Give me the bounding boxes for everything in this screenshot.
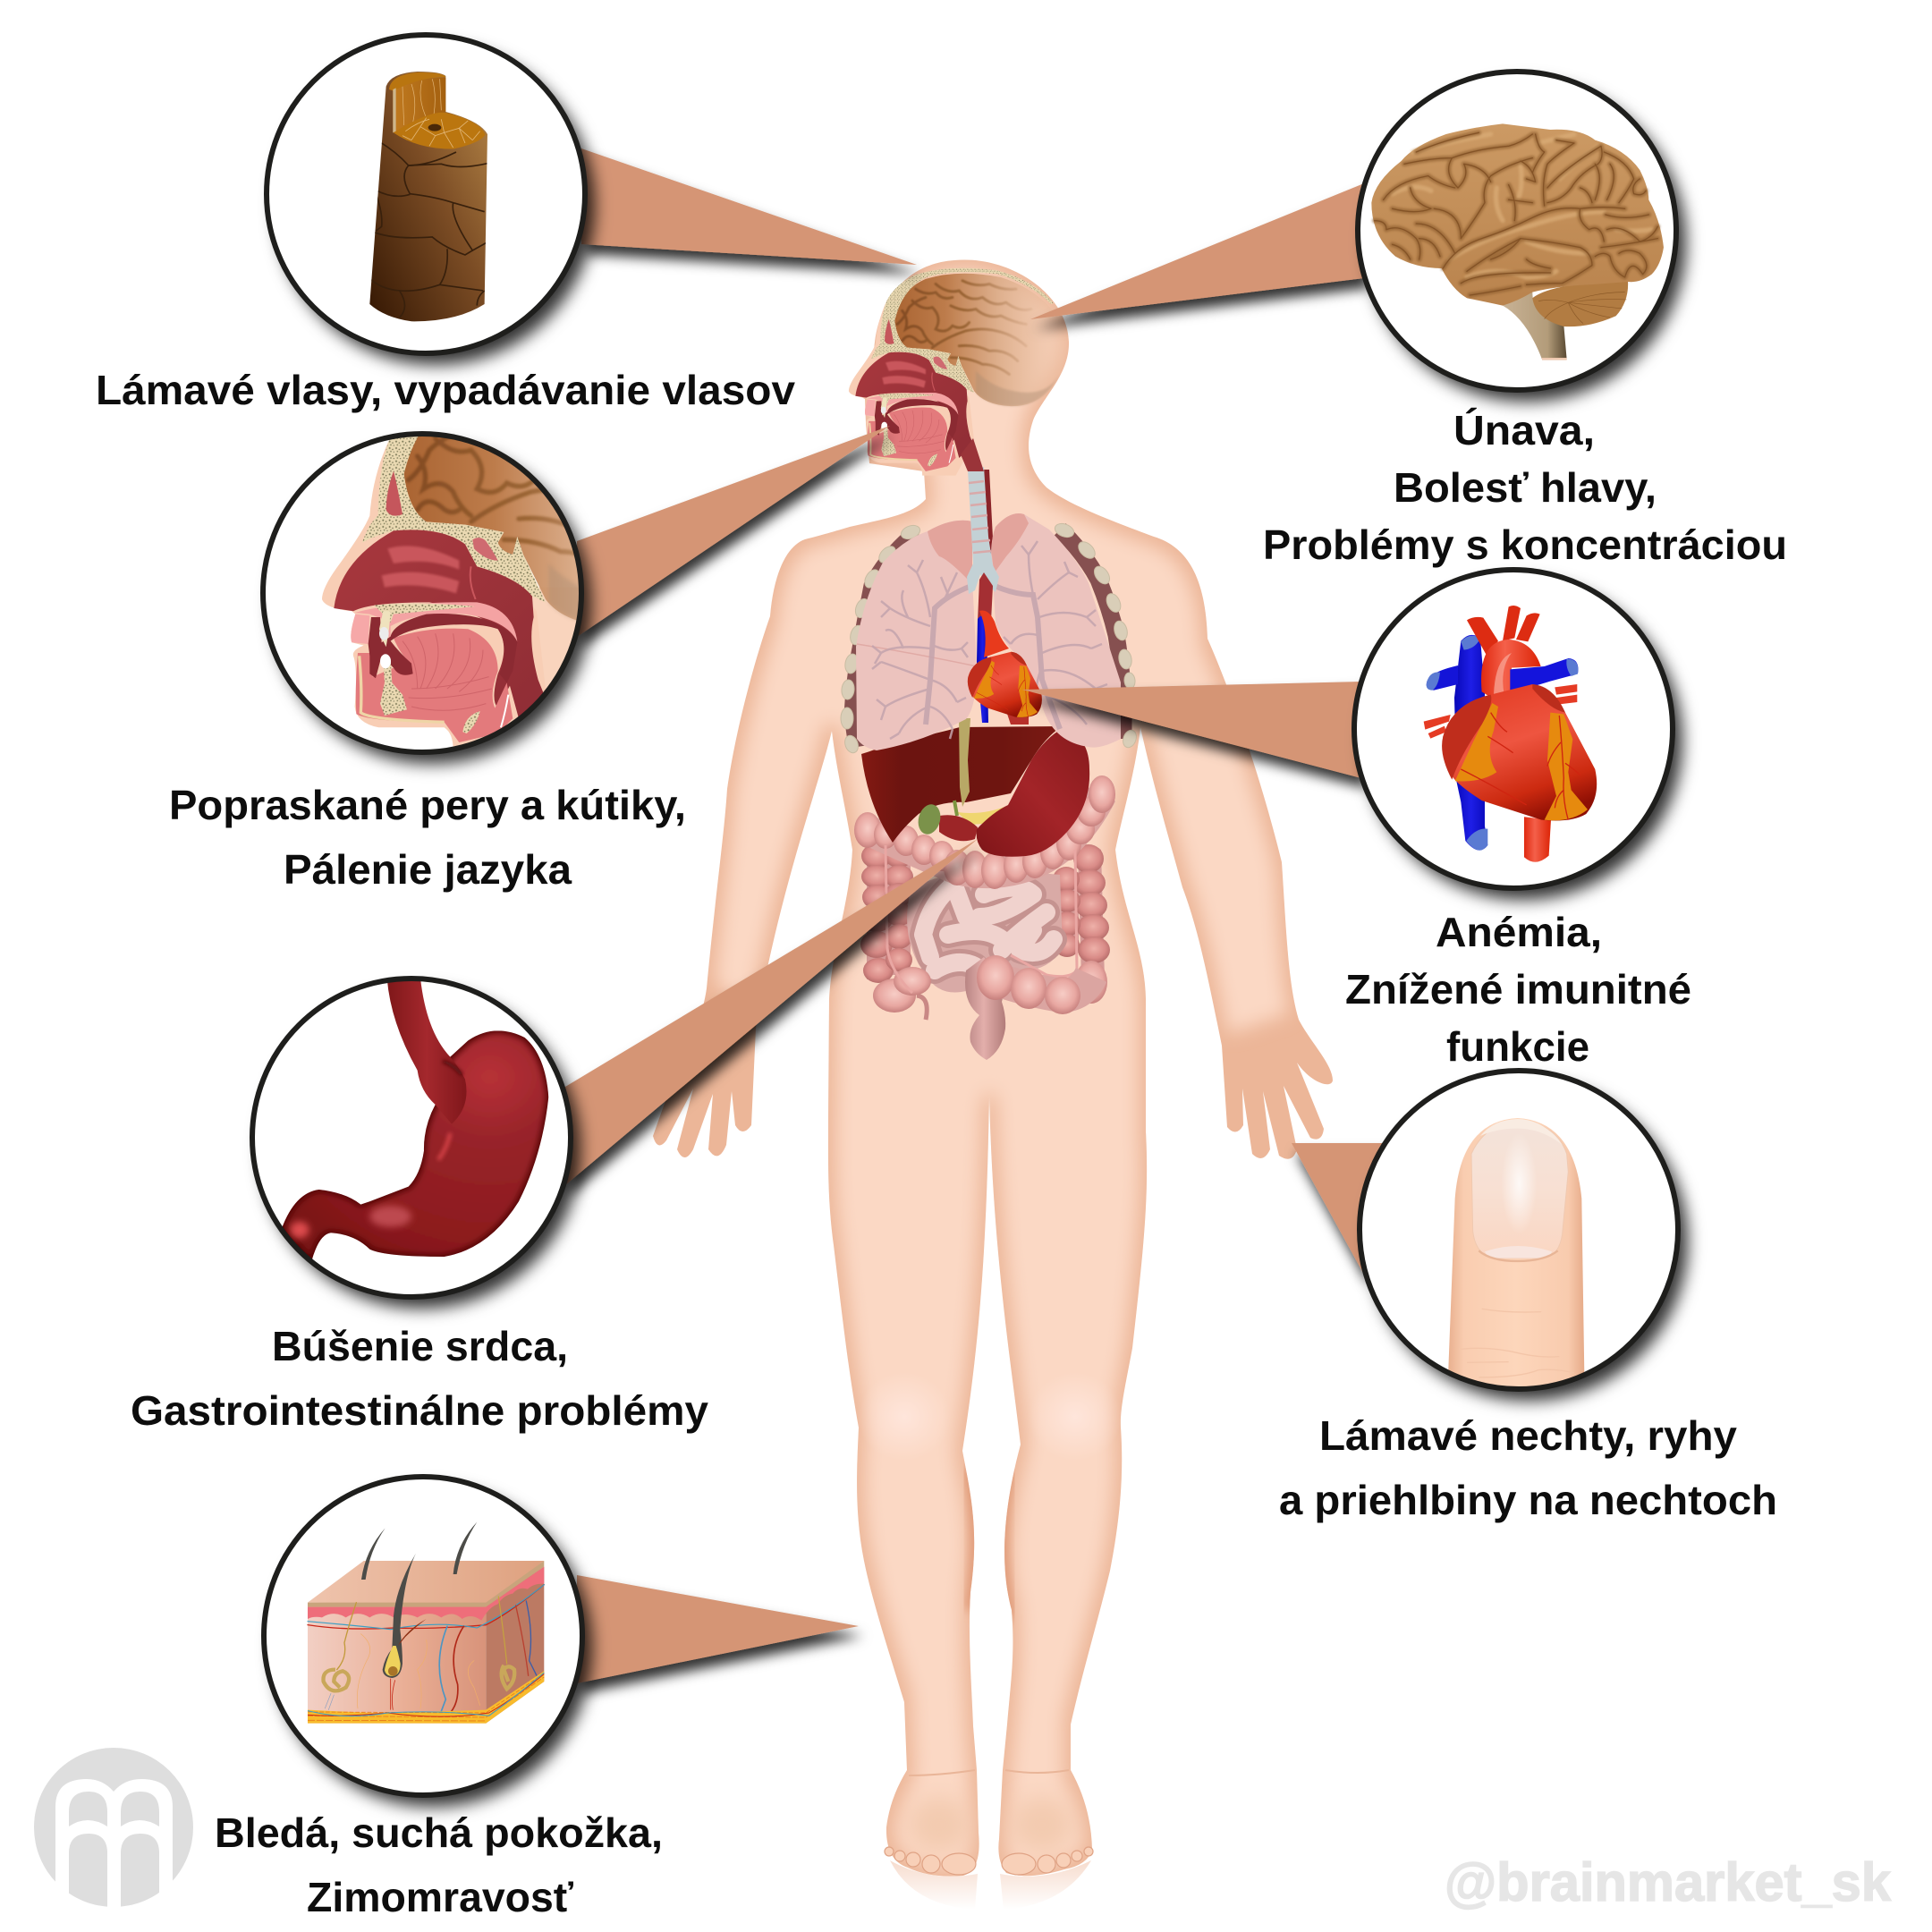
watermark: @brainmarket_sk [1445,1852,1892,1912]
heart small [968,652,1042,717]
colon backing [878,832,1093,979]
label: heart [1345,909,1691,1070]
label: stomach: Búšenie srdca, [272,1323,568,1369]
esophagus lower [978,572,993,622]
wedge: heart [1022,682,1361,778]
label: nail: Lámavé nechty, ryhy [1319,1412,1737,1459]
panel: mouth [259,431,604,776]
label: heart: Znížené imunitné [1345,966,1691,1013]
label: heart: Anémia, [1436,909,1602,955]
label: stomach: Gastrointestinálne problémy [131,1387,708,1434]
label: brain: Problémy s koncentráciou [1263,521,1787,568]
sigmoid segments [977,955,1080,1014]
panel: hair [267,35,585,353]
callout wedges [565,148,1386,1683]
vena cava small [977,615,988,723]
icon: fingernail [1447,1118,1585,1393]
label: brain: Bolesť hlavy, [1394,464,1657,511]
label: nail: a priehlbiny na nechtoch [1279,1477,1777,1523]
wedge: hair [581,148,917,265]
label: skin: Zimomravosť [307,1874,574,1920]
trachea [967,467,999,594]
label: stomach [131,1323,708,1434]
label: brain: Únava, [1453,407,1595,453]
human body figure [626,242,1360,1910]
gallbladder [915,801,944,837]
panel: heart [1354,570,1673,888]
label: mouth: Pálenie jazyka [284,846,572,893]
icon: heart [1424,606,1597,862]
colon back row [860,843,1110,983]
wedge: mouth [577,426,890,637]
sigmoid colon [984,975,1091,996]
small intestine [907,871,1063,993]
icon: brain [1371,123,1664,360]
rectum [965,957,1006,1060]
body silhouette [626,242,1360,1896]
label: heart: funkcie [1446,1023,1589,1070]
label: skin [215,1809,663,1920]
aorta small [979,610,1009,657]
toes [885,1847,1093,1875]
stomach [977,727,1089,857]
icon: head cross-section [322,436,579,746]
label: skin: Bledá, suchá pokožka, [215,1809,663,1856]
panel: brain [1358,72,1676,390]
aorta lower small [1006,711,1029,724]
duodenum [939,815,978,841]
logo [34,1748,193,1907]
head section [849,268,1066,476]
wedge: brain [1030,183,1364,319]
liver [861,726,1062,843]
right lung [991,513,1121,748]
panel: nail [1360,1071,1678,1393]
pancreas [957,805,1009,825]
label: mouth: Popraskané pery a kútiky, [169,782,686,828]
ligament [959,718,970,807]
label: brain [1263,407,1787,568]
pharynx tube [961,438,984,471]
left lung [856,521,977,750]
icon: stomach [283,981,549,1259]
label: hair: Lámavé vlasy, vypadávanie vlasov [96,367,795,413]
panel: stomach [252,978,571,1297]
bile duct [954,801,957,816]
esophagus [980,470,995,572]
label: nail [1279,1412,1777,1523]
wedge: stomach [565,839,978,1185]
panel: skin [264,1477,582,1795]
wedge: nail [1292,1143,1386,1275]
wedge: skin [577,1575,859,1683]
ribs [841,521,1139,755]
feet reflection [890,1860,1091,1910]
icon: hair shaft [369,72,487,321]
colon front [854,775,1115,1020]
internal organs [841,268,1139,1060]
label: mouth [169,782,686,893]
icon: skin block [308,1522,544,1724]
